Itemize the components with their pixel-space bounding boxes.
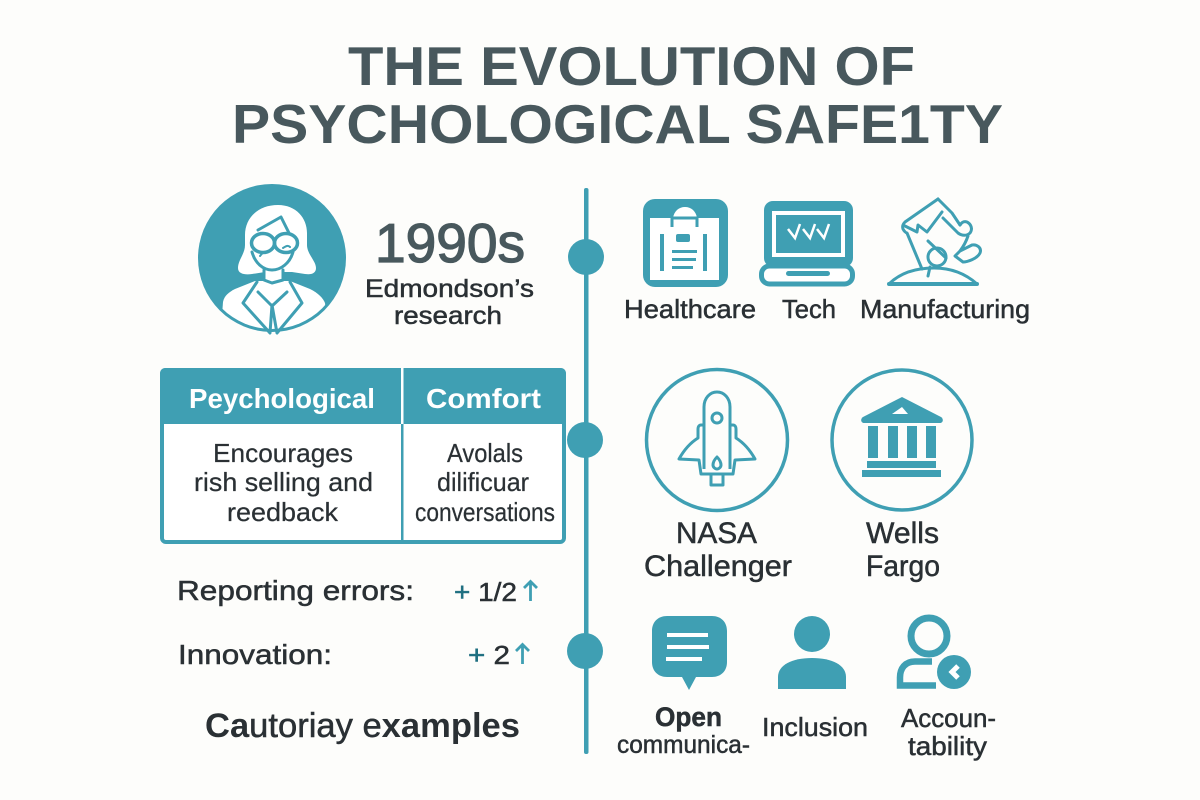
column: Psychological xyxy=(189,383,375,527)
stat: reporting errors xyxy=(177,575,537,607)
label: NASA Challenger: Challenger xyxy=(644,550,792,583)
title xyxy=(232,35,1003,155)
stat: innovation: + 2 xyxy=(468,640,510,670)
icon: inclusion person xyxy=(778,616,846,689)
text: Edmondson's research: research xyxy=(394,302,502,330)
title: THE EVOLUTION OF xyxy=(348,35,915,97)
label: Wells Fargo xyxy=(866,517,940,583)
label: Healthcare: Healthcare xyxy=(624,294,756,324)
column: Comfort xyxy=(415,383,555,527)
timeline xyxy=(567,188,604,754)
icon: NASA rocket xyxy=(646,370,788,510)
label: NASA Challenger xyxy=(644,517,792,583)
icon: accountability person xyxy=(900,618,971,689)
label: NASA Challenger: NASA xyxy=(676,517,757,550)
label: Wells Fargo: Wells xyxy=(866,517,939,550)
stat: innovation xyxy=(178,639,529,670)
title: PSYCHOLOGICAL SAFE1TY xyxy=(232,93,1003,155)
label: Manufacturing: Manufacturing xyxy=(860,294,1030,324)
column: Psychological: rish selling and xyxy=(194,467,373,497)
column: Psychological: Peychological xyxy=(189,383,375,414)
icon: manufacturing hand xyxy=(889,199,980,284)
label: Accountability xyxy=(901,703,996,761)
column: Comfort: conversations xyxy=(415,497,555,527)
column: Comfort: Avolals xyxy=(447,438,523,468)
heading: 1990s: 1990s xyxy=(375,212,525,274)
column: Psychological: Encourages xyxy=(213,438,353,468)
icon: healthcare clipboard xyxy=(643,199,728,287)
stat: innovation: Innovation: xyxy=(178,639,332,670)
label: Inclusion: Inclusion xyxy=(762,712,868,742)
stat: reporting errors: + 1/2 xyxy=(454,577,517,607)
label: Tech: Tech xyxy=(782,294,836,324)
label: Wells Fargo: Fargo xyxy=(866,550,940,583)
icon: researcher portrait xyxy=(198,184,346,343)
column: Psychological: reedback xyxy=(227,497,339,527)
label: Open communication: Open xyxy=(655,702,722,732)
icon: Wells Fargo bank xyxy=(832,370,972,510)
label: Accountability: Accoun- xyxy=(901,703,996,733)
stat: reporting errors: Reporting errors: xyxy=(177,575,414,606)
icon: tech laptop xyxy=(762,201,853,284)
heading: cautionary examples: Cautoriay examples xyxy=(205,707,520,745)
label: Accountability: tability xyxy=(908,731,987,761)
column: Comfort: Comfort xyxy=(426,383,541,414)
text: Edmondson's research xyxy=(365,275,534,330)
label: Open communication xyxy=(617,702,750,759)
label: Open communication: communica- xyxy=(617,731,750,759)
icon: open communication speech bubble xyxy=(652,616,727,690)
text: Edmondson's research: Edmondson’s xyxy=(365,275,534,303)
column: Comfort: dilificuar xyxy=(437,467,529,497)
panel: comparison table xyxy=(160,368,566,542)
